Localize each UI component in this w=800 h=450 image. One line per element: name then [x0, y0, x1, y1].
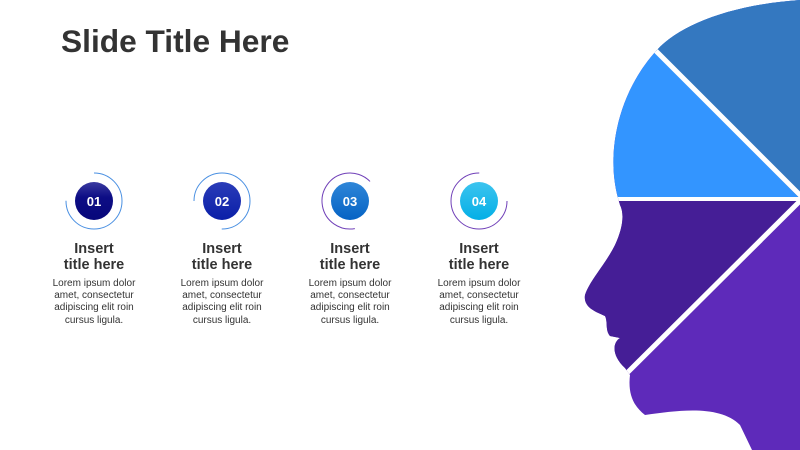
circle 03: 03 [343, 194, 357, 209]
circle 04: 04 [472, 194, 487, 209]
text block 2: Lorem ipsum dolor amet, consectetur adipiscing elit roin cursus ligula. [181, 278, 263, 326]
text block 3: Insert [330, 241, 370, 257]
text block 2 [181, 241, 264, 326]
circle 03 [318, 169, 382, 233]
circle 01 [66, 173, 122, 229]
circle 02: 02 [215, 194, 229, 209]
text block 1 [53, 241, 136, 326]
head graphic [584, 0, 800, 450]
text block 4: Insert [459, 241, 499, 257]
text block 4 [438, 241, 520, 326]
icons: numbered circles [66, 172, 508, 230]
text block 1: Insert [74, 241, 114, 257]
circle 04 [451, 173, 507, 229]
text block 3: title here [320, 257, 380, 273]
text block 3: Lorem ipsum dolor amet, consectetur adipiscing elit roin cursus ligula. [309, 278, 391, 326]
text block 1: title here [64, 257, 124, 273]
text block 1: Lorem ipsum dolor amet, consectetur adipiscing elit roin cursus ligula. [53, 278, 135, 326]
title: Slide Title Here [61, 23, 289, 59]
circle 02 [194, 173, 250, 229]
text block 4: title here [449, 257, 509, 273]
text block 2: title here [192, 257, 252, 273]
text block 4: Lorem ipsum dolor amet, consectetur adipiscing elit roin cursus ligula. [438, 278, 520, 326]
circle 01: 01 [87, 194, 101, 209]
text block 2: Insert [202, 241, 242, 257]
text block 3 [309, 241, 392, 326]
